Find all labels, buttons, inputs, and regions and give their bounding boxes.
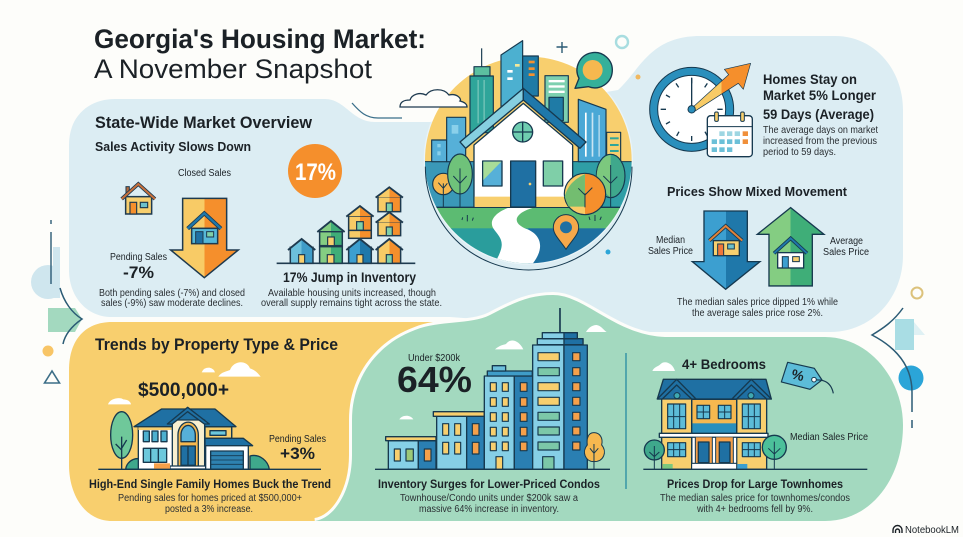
decoration: right side shapes xyxy=(872,288,925,428)
text: prices description: The median sales price dipped 1% while xyxy=(677,297,838,308)
badge: 17 percent xyxy=(288,144,342,198)
text: days on market description: period to 59 days. xyxy=(763,147,836,158)
icon: down arrow with blue house xyxy=(171,198,238,278)
text: condo description: massive 64% increase in inventory. xyxy=(419,504,559,515)
icon: teal ring xyxy=(616,36,628,48)
label: median sales price xyxy=(648,235,693,257)
stat: under 200k 64 percent: Under $200k xyxy=(408,353,461,364)
icon: blue down arrow with house xyxy=(692,211,760,289)
icon: percent price tag xyxy=(781,362,833,393)
illustration: high-end single family home xyxy=(98,362,321,469)
stat: pending sales minus 7 percent xyxy=(110,252,167,282)
text: condo description: Townhouse/Condo units under $200k saw a xyxy=(400,493,578,504)
text: high-end description: posted a 3% increase. xyxy=(165,504,253,515)
label: average sales price: Average xyxy=(830,236,863,247)
heading: prices show mixed movement: Prices Show Mixed Movement xyxy=(667,184,848,199)
text: high-end description xyxy=(118,493,302,515)
heading: sales activity slows down: Sales Activity Slows Down xyxy=(95,139,251,154)
text: days on market description: increased from the previous xyxy=(763,136,877,147)
illustration: house and city in circle xyxy=(420,41,638,270)
icon: plus sign xyxy=(556,42,568,53)
text: townhome description: with 4+ bedrooms fell by 9%. xyxy=(696,504,813,515)
stat: under 200k 64 percent: 64% xyxy=(397,359,472,400)
watermark: NotebookLM: NotebookLM xyxy=(905,524,959,536)
heading: 4+ bedrooms: 4+ Bedrooms xyxy=(682,356,766,372)
heading: homes stay on market longer: Homes Stay on xyxy=(763,72,857,87)
icon: percent price tag: % xyxy=(790,366,806,384)
panel: yellow property type background xyxy=(69,322,440,521)
text: sales decline description: sales (-9%) saw moderate declines. xyxy=(101,298,243,309)
text: inventory description: overall supply remains tight across the state. xyxy=(261,298,442,309)
heading: prices drop for large townhomes: Prices Drop for Large Townhomes xyxy=(667,477,843,491)
panel: green property type background xyxy=(315,295,903,521)
label: average sales price xyxy=(823,236,869,258)
label: average sales price: Sales Price xyxy=(823,247,869,258)
icon: blue dot xyxy=(606,250,610,254)
label: closed sales: Closed Sales xyxy=(178,168,231,179)
label: median sales price: Sales Price xyxy=(648,246,693,257)
divider between green sections xyxy=(625,353,627,489)
title: A November Snapshot xyxy=(94,54,372,84)
heading: state-wide market overview: State-Wide Market Overview xyxy=(95,114,312,132)
text: days on market description xyxy=(763,125,878,158)
stat: pending sales minus 7 percent: Pending Sales xyxy=(110,252,167,263)
stat: pending sales plus 3 percent xyxy=(269,434,326,463)
label: median sales price: Median Sales Price xyxy=(790,432,868,443)
text: townhome description: The median sales price for townhomes/condos xyxy=(660,493,850,504)
title xyxy=(94,24,426,84)
stat: pending sales plus 3 percent: Pending Sales xyxy=(269,434,326,445)
icon: green up arrow with house xyxy=(757,208,824,286)
heading: homes stay on market longer xyxy=(763,72,877,122)
title: Georgia's Housing Market: xyxy=(94,24,426,54)
text: townhome description xyxy=(660,493,850,515)
icon: small orange roof house xyxy=(122,184,155,214)
text: inventory description xyxy=(261,288,442,309)
text: sales decline description xyxy=(99,288,245,309)
text: prices description xyxy=(677,297,838,319)
icon: rising stacks of houses xyxy=(277,187,415,263)
text: high-end description: Pending sales for homes priced at $500,000+ xyxy=(118,493,302,504)
label: median sales price: Median xyxy=(656,235,685,246)
text: inventory description: Available housing units increased, though xyxy=(268,288,436,299)
icon: orange dot xyxy=(636,74,640,80)
heading: homes stay on market longer: 59 Days (Average) xyxy=(763,107,874,122)
heading: 17 percent jump in inventory: 17% Jump in Inventory xyxy=(283,269,416,285)
heading: homes stay on market longer: Market 5% Longer xyxy=(763,88,877,103)
heading: inventory surges for condos: Inventory Surges for Lower-Priced Condos xyxy=(378,477,600,491)
stat: pending sales plus 3 percent: +3% xyxy=(280,444,315,463)
text: days on market description: The average days on market xyxy=(763,125,878,136)
decoration: line under cloud xyxy=(352,103,402,118)
illustration: large townhome xyxy=(643,362,867,469)
text: condo description xyxy=(400,493,578,515)
icon: clock with rising arrow and calendar xyxy=(650,63,752,157)
heading: trends by property type and price: Trends by Property Type & Price xyxy=(95,336,338,354)
decoration: left side shapes xyxy=(31,220,82,383)
stat: pending sales minus 7 percent: -7% xyxy=(123,263,154,282)
text: sales decline description: Both pending sales (-7%) and closed xyxy=(99,288,245,299)
panel: blue market overview background xyxy=(69,36,903,332)
text: prices description: the average sales price rose 2%. xyxy=(692,308,823,319)
heading: high-end single family homes: High-End Single Family Homes Buck the Trend xyxy=(89,477,331,491)
stat: 500000 plus: $500,000+ xyxy=(138,380,229,401)
badge: 17 percent: 17% xyxy=(295,159,336,186)
icon: cloud outline xyxy=(400,90,467,107)
illustration: condo buildings xyxy=(375,308,610,469)
